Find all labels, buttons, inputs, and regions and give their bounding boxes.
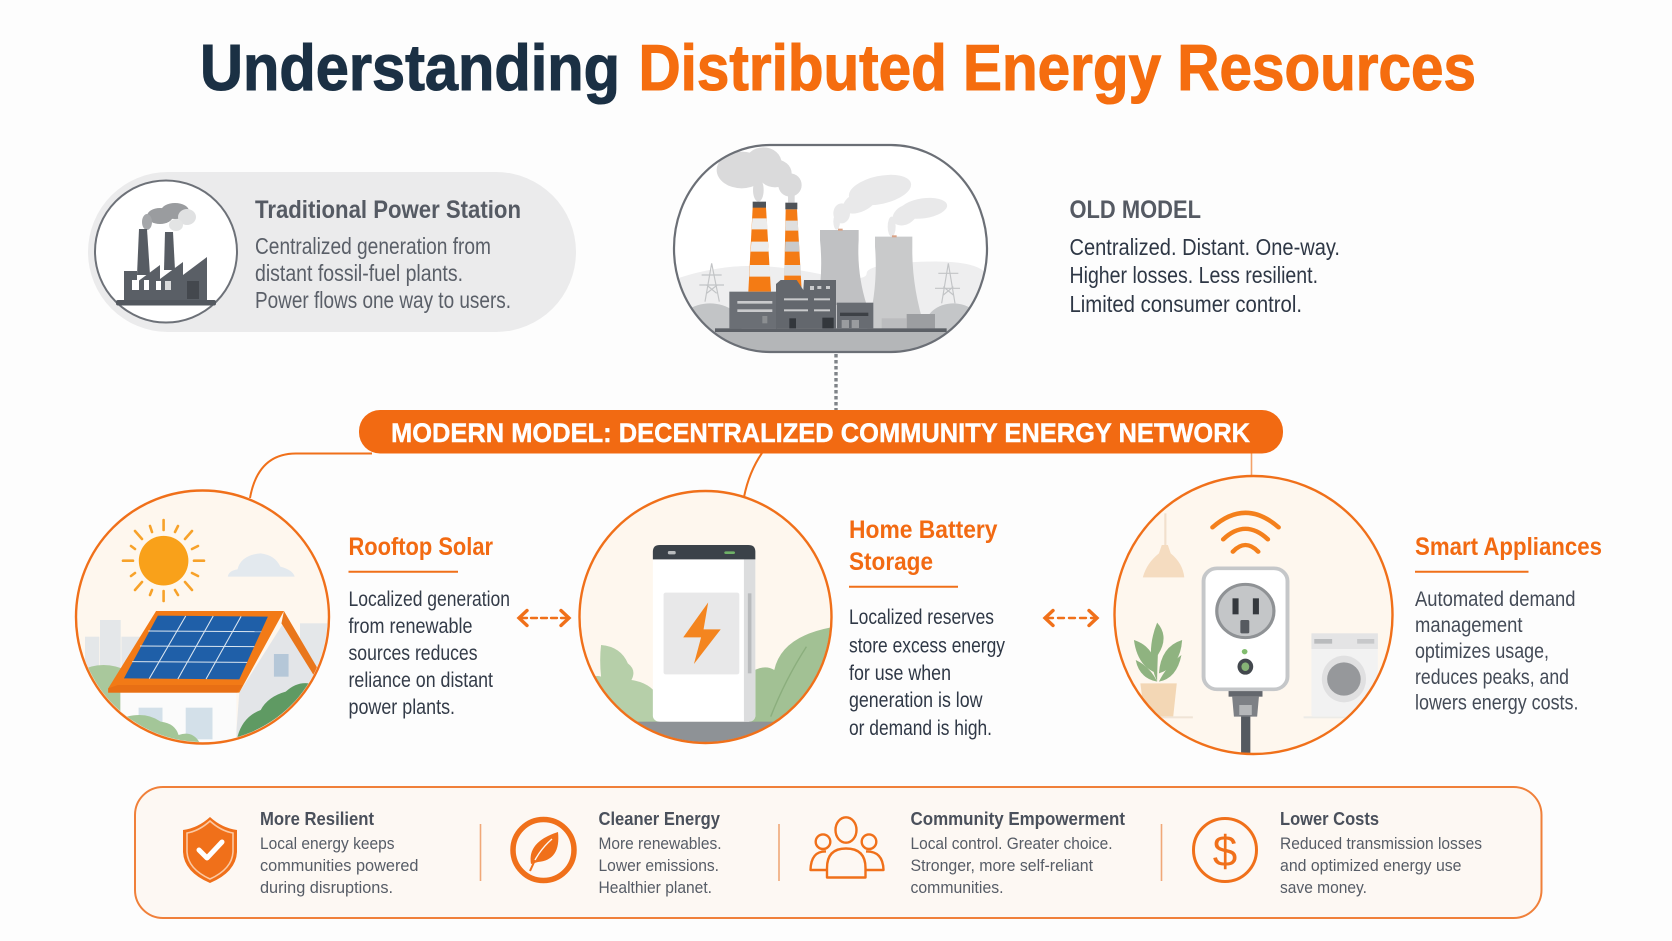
foliage [596, 645, 660, 722]
pylons [699, 263, 960, 303]
text block: home battery storage: Localized reserves [849, 606, 994, 629]
cooling towers [817, 230, 867, 305]
banner: modern model: MODERN MODEL: DECENTRALIZED COMMUNITY ENERGY NETWORK [391, 418, 1250, 448]
city skyline [85, 620, 328, 668]
text block: rooftop solar: reliance on distant [348, 669, 493, 692]
text: more resilient [260, 809, 418, 897]
text block: old model: Centralized. Distant. One-way. [1070, 234, 1340, 260]
arrow: battery to smart appliances [1045, 610, 1097, 626]
heading: traditional power station: Traditional Power Station [255, 196, 521, 224]
cord and plug [1241, 716, 1250, 753]
text block: smart appliances: management [1415, 614, 1523, 637]
text block: old model: Higher losses. Less resilient. [1070, 262, 1318, 288]
panel: benefits [135, 787, 1542, 918]
text: cleaner energy [598, 809, 722, 897]
text block: smart appliances: lowers energy costs. [1415, 692, 1578, 714]
text: more resilient: during disruptions. [260, 878, 393, 897]
text: cleaner energy: Healthier planet. [598, 878, 712, 897]
icon: leaf [513, 820, 574, 880]
title: Understanding [200, 31, 620, 104]
connector: banner to smart appliances [1250, 453, 1252, 477]
text block: rooftop solar: from renewable [348, 615, 472, 638]
text block: smart appliances: Automated demand [1415, 588, 1576, 611]
text: more resilient: communities powered [260, 856, 418, 875]
text: community empowerment: Local control. Greater choice. [910, 834, 1112, 853]
text: community empowerment [910, 809, 1125, 897]
heading: home battery storage: Home Battery [849, 516, 998, 544]
illustration: smart appliances [1114, 476, 1392, 757]
connector: banner to rooftop solar [250, 454, 372, 498]
distant hills [673, 262, 988, 330]
smart plug body [1204, 568, 1287, 689]
connector: old to modern [834, 354, 838, 410]
text block: home battery storage: generation is low [849, 689, 983, 712]
icon: lightning bolt [683, 602, 721, 664]
text block: traditional description: Power flows one way to users. [255, 287, 511, 313]
text: cleaner energy: Cleaner Energy [598, 809, 720, 829]
cloud [228, 553, 295, 577]
roof [281, 611, 319, 675]
banner: modern model [359, 410, 1283, 454]
text: more resilient: More Resilient [260, 809, 374, 829]
icon: factory [95, 180, 237, 322]
icon: dollar [1194, 818, 1256, 882]
icon: shield [183, 817, 237, 883]
text: cleaner energy: More renewables. [598, 834, 722, 853]
icon: dollar: $ [1213, 827, 1237, 876]
text block: traditional description [255, 233, 511, 313]
text: more resilient: Local energy keeps [260, 834, 394, 853]
lamp [1164, 513, 1166, 547]
heading: rooftop solar: Rooftop Solar [348, 533, 493, 561]
plant [1134, 623, 1182, 682]
smoke [717, 147, 802, 203]
house walls [236, 625, 314, 740]
buildings [729, 292, 777, 328]
washing machine [1312, 649, 1378, 716]
heading: home battery storage: Storage [849, 548, 933, 576]
connector: banner to battery [744, 453, 762, 497]
bushes [238, 683, 308, 737]
panel: traditional power station [88, 172, 576, 332]
arrow: solar to battery [519, 610, 569, 626]
scene: house with solar roof [75, 553, 329, 747]
text block: rooftop solar: Localized generation [348, 588, 510, 611]
text: lower costs: save money. [1280, 878, 1367, 897]
chimney 1 [748, 207, 771, 292]
text block: traditional description: Centralized generation from [255, 233, 491, 259]
illustration: centralized power plant [673, 145, 988, 355]
solar panel [124, 616, 268, 679]
text block: home battery storage: for use when [849, 662, 951, 685]
text: community empowerment: communities. [910, 878, 1004, 897]
chimney 2 [784, 209, 802, 290]
illustration: home battery [580, 491, 832, 745]
text block: home battery storage [849, 516, 1005, 740]
text: community empowerment: Community Empowerment [910, 809, 1125, 829]
text block: traditional description: distant fossil-fuel plants. [255, 260, 463, 286]
text: lower costs: Lower Costs [1280, 809, 1379, 829]
icon: wifi [1212, 513, 1279, 552]
text block: rooftop solar: power plants. [348, 696, 455, 719]
icon: community [810, 817, 884, 878]
illustration: rooftop solar [75, 490, 329, 747]
text block: old model: Limited consumer control. [1070, 291, 1302, 317]
text: lower costs: and optimized energy use [1280, 856, 1462, 875]
text: lower costs: Reduced transmission losses [1280, 834, 1482, 853]
text block: old model: OLD MODEL [1070, 196, 1201, 224]
text block: rooftop solar [348, 533, 510, 719]
icon: sun [123, 520, 204, 601]
ground [638, 722, 774, 742]
title [200, 31, 1476, 104]
title: Distributed Energy Resources [638, 31, 1476, 104]
text: lower costs [1280, 809, 1482, 897]
heading: home battery storage [849, 516, 998, 576]
ground [714, 332, 946, 351]
heading: smart appliances: Smart Appliances [1415, 533, 1602, 561]
text block: smart appliances: optimizes usage, [1415, 640, 1549, 663]
text block: smart appliances [1415, 533, 1602, 714]
text block: home battery storage: store excess energy [849, 634, 1005, 658]
text block: smart appliances: reduces peaks, and [1415, 666, 1569, 689]
text: community empowerment: Stronger, more self-reliant [910, 856, 1093, 875]
battery unit [653, 550, 755, 722]
text block: home battery storage: or demand is high. [849, 717, 992, 740]
text block: old model [1070, 196, 1340, 317]
text block: rooftop solar: sources reduces [348, 642, 478, 665]
text: cleaner energy: Lower emissions. [598, 856, 719, 875]
